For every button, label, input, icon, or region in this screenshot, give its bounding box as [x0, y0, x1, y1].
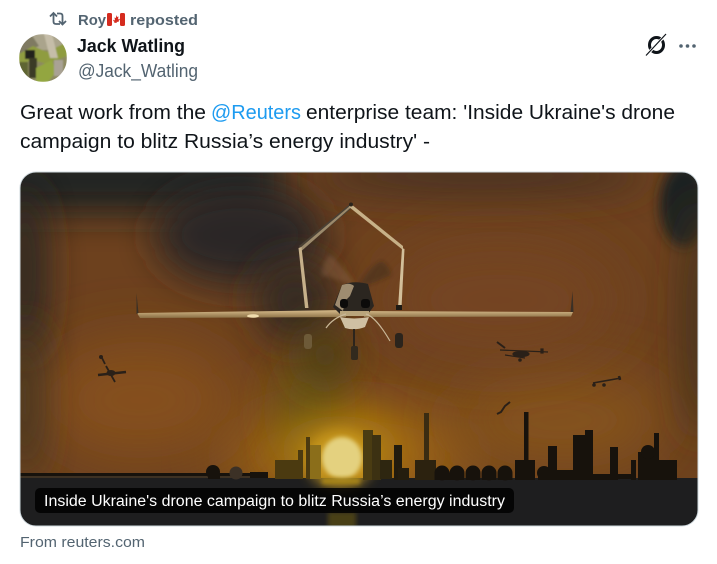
author handle: @Jack_Watling [78, 61, 198, 82]
propeller blur [322, 255, 391, 287]
main drone [136, 202, 574, 360]
tweet text: campaign to blitz Russia’s energy industry' - [20, 131, 430, 153]
fuselage [333, 282, 374, 314]
far right drone [593, 376, 621, 386]
icon: Canadian flag [107, 13, 125, 26]
upper right drone [497, 342, 548, 361]
icon: more dots [679, 44, 696, 48]
fire glow [306, 430, 374, 528]
avatar [19, 34, 67, 82]
article image [20, 172, 698, 526]
caption text: Inside Ukraine's drone campaign to blitz Russia’s energy industry [44, 493, 505, 510]
icon: Grok slashed circle [646, 34, 667, 56]
small drones [98, 342, 621, 414]
tail booms [299, 205, 351, 248]
sky and smoke [20, 172, 698, 478]
repost label: reposted [130, 12, 198, 29]
repost banner [50, 12, 198, 29]
tweet text [20, 102, 675, 153]
tweet text: Great work from the [20, 102, 206, 124]
lower drone [497, 402, 510, 414]
tweet text: enterprise team: 'Inside Ukraine's drone [306, 102, 675, 124]
landing gear [326, 314, 390, 341]
left drone [98, 356, 126, 382]
caption background [35, 488, 514, 513]
water [20, 478, 698, 528]
icon: repost arrows [50, 13, 66, 24]
tweet text: @Reuters [211, 102, 301, 124]
repost name: Roy [78, 12, 107, 29]
refinery skyline [20, 412, 677, 480]
wing [137, 310, 573, 318]
source link: From reuters.com [20, 534, 145, 551]
author name: Jack Watling [77, 36, 185, 56]
image border [20, 172, 698, 526]
